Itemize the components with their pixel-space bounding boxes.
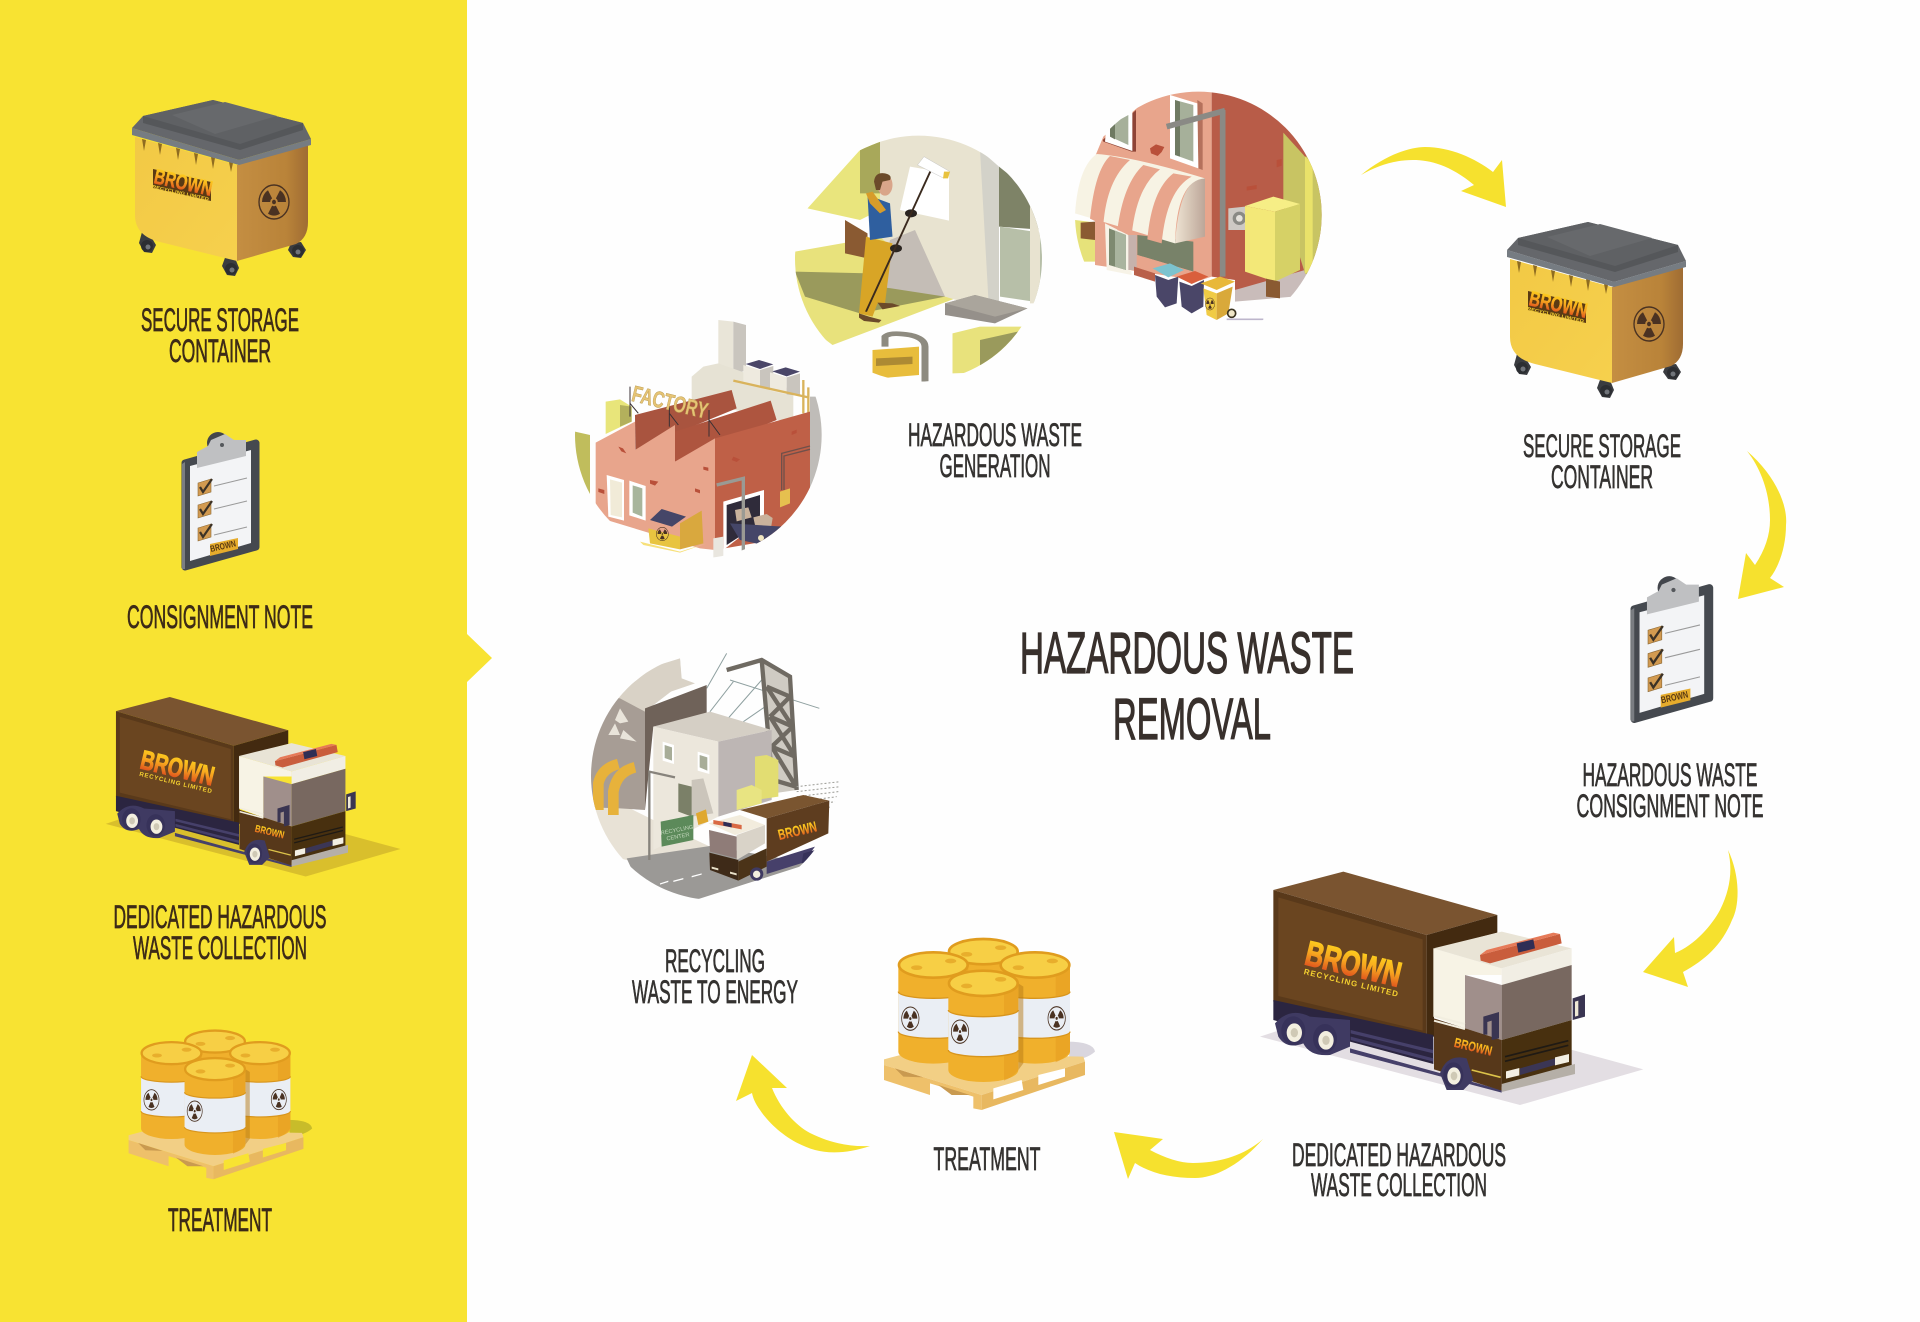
label: hazardous waste consignment note — [1576, 757, 1764, 824]
icon: storage container: RECYCLING LIMITED — [1527, 306, 1585, 324]
icon: collection truck: BROWN — [1453, 1035, 1494, 1059]
title: HAZARDOUS WASTE — [1020, 621, 1354, 686]
scene: factory: FACTORY — [629, 380, 711, 424]
label: hazardous waste consignment note: CONSIGNMENT NOTE — [1576, 788, 1764, 824]
label: recycling waste to energy: WASTE TO ENERGY — [632, 974, 798, 1010]
arrow: collection to treatment — [1114, 1132, 1263, 1179]
arrow: treatment to recycling — [736, 1055, 870, 1152]
scene: recycling centre with truck: BROWN — [777, 819, 819, 844]
label: recycling waste to energy: RECYCLING — [665, 943, 765, 979]
icon: collection truck — [1260, 872, 1643, 1105]
yellow panel with pointer — [0, 0, 492, 1322]
scene: recycling centre with truck: RECYCLING — [660, 825, 694, 837]
label: secure storage container: CONTAINER — [1551, 459, 1653, 495]
icon: storage container — [1507, 222, 1686, 398]
label: hazardous waste consignment note: HAZARDOUS WASTE — [1582, 757, 1758, 793]
label: dedicated hazardous waste collection: WASTE COLLECTION — [1311, 1167, 1487, 1203]
icon: collection truck: RECYCLING LIMITED — [139, 771, 213, 795]
label: secure storage container — [1523, 428, 1681, 495]
scene: painter at wall — [795, 133, 1055, 382]
icon: collection truck: BROWN — [138, 745, 217, 791]
title: REMOVAL — [1113, 687, 1271, 752]
scene: factory — [575, 320, 827, 558]
icon: clipboard — [1631, 576, 1710, 721]
sidebar: legend of removal items — [0, 0, 492, 1322]
label: secure storage container: SECURE STORAGE — [141, 302, 299, 338]
icon: barrels on pallet — [129, 1031, 312, 1179]
icon: storage container: BROWN — [1527, 287, 1590, 323]
scene: recycling centre with truck — [570, 653, 840, 901]
label: consignment note: CONSIGNMENT NOTE — [127, 599, 313, 635]
label: dedicated hazardous waste collection: DEDICATED HAZARDOUS — [1292, 1137, 1506, 1173]
label: recycling waste to energy — [632, 943, 798, 1010]
label: hazardous waste generation: GENERATION — [940, 448, 1050, 484]
label: dedicated hazardous waste collection — [114, 899, 326, 966]
icon: barrels on pallet — [884, 939, 1095, 1110]
scene: recycling centre with truck: CENTER — [666, 832, 690, 843]
icon: clipboard: BROWN — [209, 538, 237, 554]
icon: collection truck: BROWN — [254, 824, 285, 841]
label: hazardous waste generation: HAZARDOUS WASTE — [908, 417, 1082, 453]
label: treatment: TREATMENT — [168, 1202, 272, 1238]
label: secure storage container: SECURE STORAGE — [1523, 428, 1681, 464]
arrow: storage to note — [1738, 451, 1786, 599]
icon: storage container — [132, 100, 311, 276]
icon: storage container: BROWN — [152, 165, 215, 201]
icon: storage container: RECYCLING LIMITED — [152, 184, 210, 202]
label: secure storage container — [141, 302, 299, 369]
arrow: generation to storage — [1361, 147, 1506, 207]
label: dedicated hazardous waste collection — [1292, 1137, 1506, 1203]
label: hazardous waste generation — [908, 417, 1082, 484]
icon: clipboard — [182, 432, 256, 569]
label: secure storage container: CONTAINER — [169, 333, 271, 369]
icon: collection truck: BROWN — [1301, 935, 1405, 995]
scene: shop front with bins — [1075, 80, 1327, 320]
label: dedicated hazardous waste collection: WASTE COLLECTION — [133, 930, 307, 966]
icon: clipboard: BROWN — [1660, 689, 1689, 706]
icon: collection truck — [106, 697, 401, 876]
label: treatment: TREATMENT — [934, 1141, 1040, 1177]
label: dedicated hazardous waste collection: DEDICATED HAZARDOUS — [114, 899, 326, 935]
icon: collection truck: RECYCLING LIMITED — [1303, 967, 1399, 999]
arrow: note to collection — [1643, 850, 1738, 987]
title — [1020, 621, 1354, 752]
